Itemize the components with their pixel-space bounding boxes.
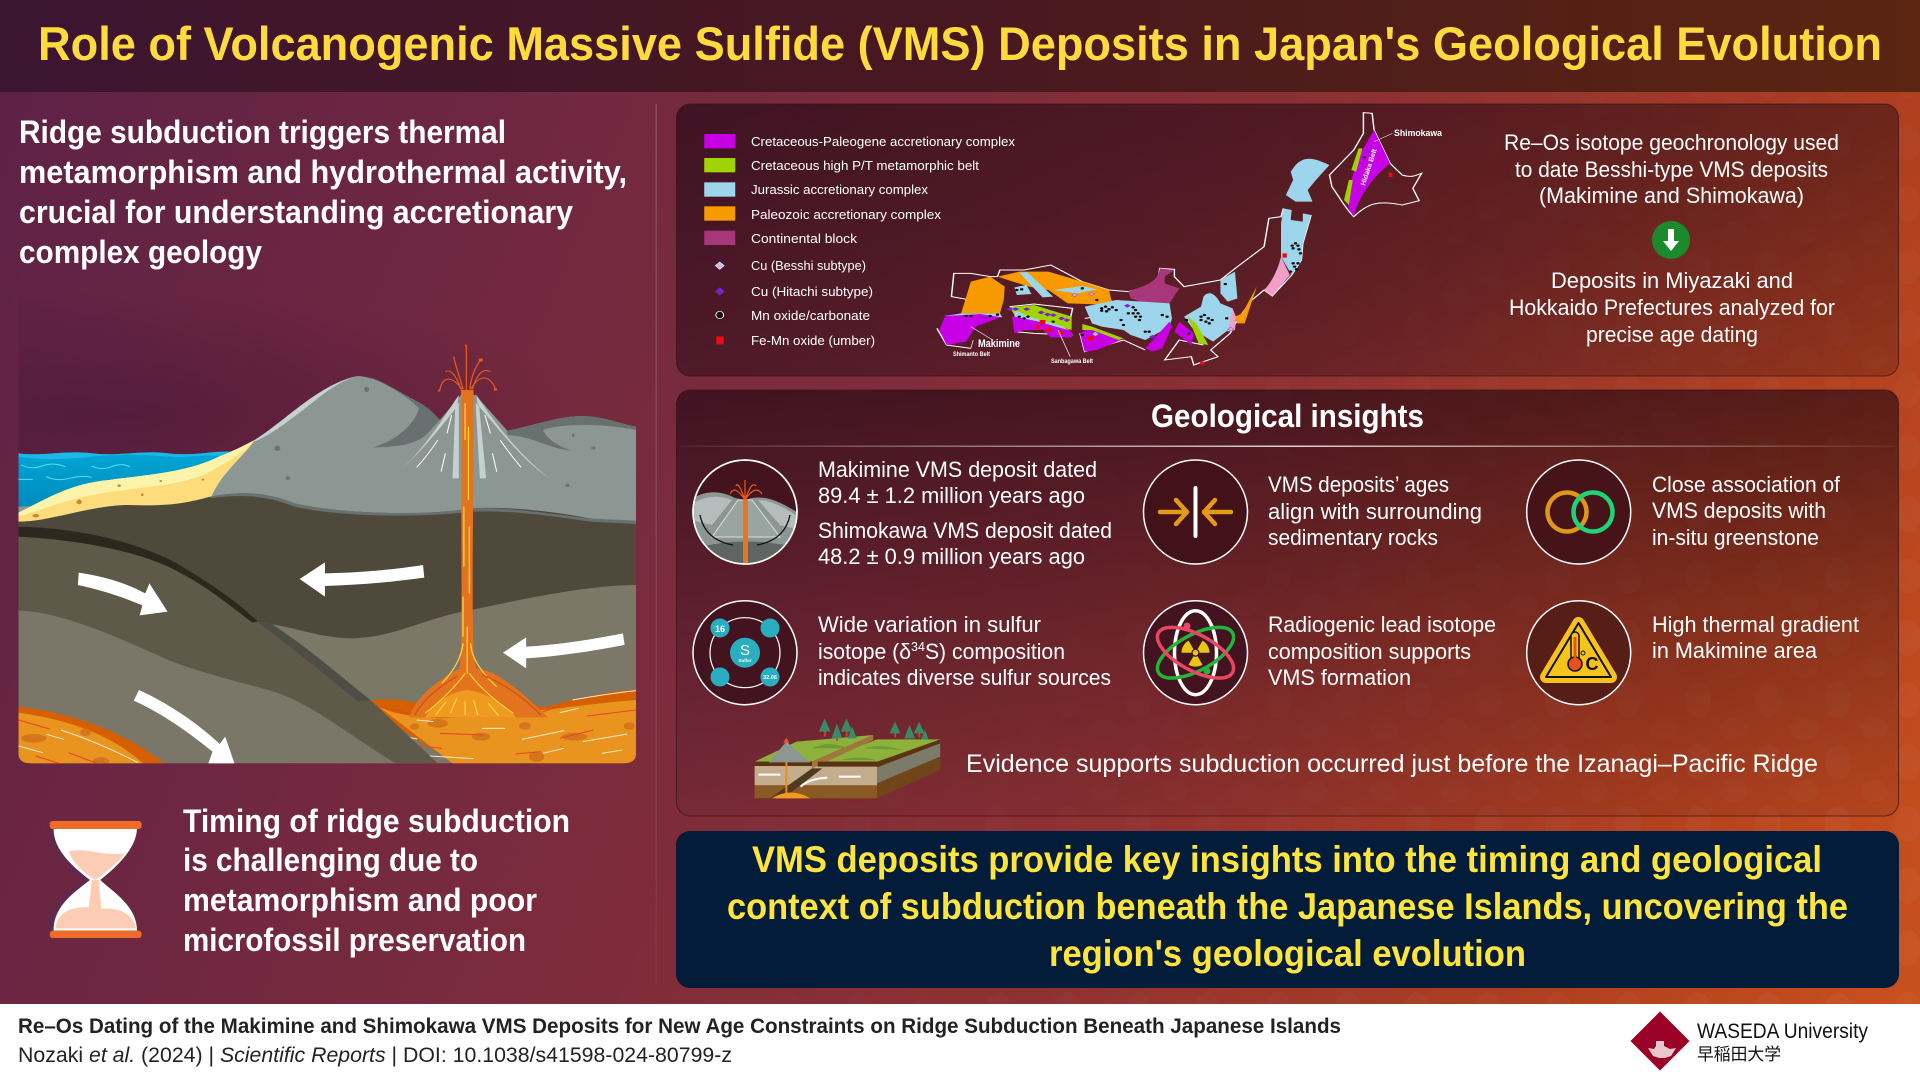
icon: linked rings xyxy=(1527,460,1631,564)
map labels: Shimokawa xyxy=(1394,128,1443,139)
panel: geological insights xyxy=(676,390,1898,816)
text: age alignment: VMS deposits’ ages xyxy=(1268,472,1449,497)
header band with title xyxy=(0,0,1920,92)
left intro text: metamorphism and hydrothermal activity, xyxy=(19,154,627,190)
text: prefectures analyzed: Hokkaido Prefectures analyzed for xyxy=(1509,295,1835,320)
text: timing challenge: metamorphism and poor xyxy=(183,882,537,918)
text: timing challenge xyxy=(183,803,570,958)
heading: Geological insights xyxy=(1151,398,1424,434)
logo: Waseda University xyxy=(1630,1012,1868,1070)
lower mantle wedge xyxy=(265,585,636,763)
text: timing challenge: Timing of ridge subduction xyxy=(183,803,570,839)
text: sulfur isotope: 34 xyxy=(911,639,925,654)
text: sulfur isotope xyxy=(818,612,1111,690)
icon: sulfur atom: Sulfur xyxy=(738,658,752,663)
eruption fountain xyxy=(440,345,496,390)
icon: sulfur atom: 32.06 xyxy=(763,675,777,681)
text: prefectures analyzed: precise age dating xyxy=(1586,322,1758,347)
text: prefectures analyzed: Deposits in Miyazaki and xyxy=(1551,268,1793,293)
text: age alignment: sedimentary rocks xyxy=(1268,525,1438,550)
map legend: Cretaceous high P/T metamorphic belt xyxy=(751,158,979,173)
magma right xyxy=(358,689,636,763)
citation reference: Nozaki et al. (2024) | Scientific Reports | DOI: 10.1038/s41598-024-80799-z xyxy=(18,1044,732,1067)
text: evidence statement: Evidence supports subduction occurred just before the Izanagi–Pacific Ridge xyxy=(966,750,1818,778)
map labels: Hidaka Belt xyxy=(1360,148,1379,187)
icon: ridge subduction block diagram xyxy=(755,718,940,798)
map of Japan xyxy=(937,113,1443,365)
panel: key conclusion: context of subduction beneath the Japanese Islands, uncovering the xyxy=(727,886,1848,927)
text: deposit dates xyxy=(818,457,1112,569)
subduction cross-section illustration xyxy=(18,344,636,764)
icon: thermal warning xyxy=(1527,601,1631,705)
map legend: Cu (Hitachi subtype) xyxy=(751,284,873,299)
arrow: upper plate xyxy=(300,562,424,597)
left intro text: complex geology xyxy=(19,234,262,270)
text: deposit dates: Makimine VMS deposit dated xyxy=(818,457,1097,482)
subducting plate xyxy=(19,537,438,763)
panel: map and dating xyxy=(676,104,1898,376)
text: timing challenge: is challenging due to xyxy=(183,842,478,878)
title: Role of Volcanogenic Massive Sulfide (VMS) Deposits in Japan's Geological Evolution xyxy=(38,17,1882,70)
oceanic lithosphere xyxy=(19,611,396,763)
text: age alignment xyxy=(1268,472,1482,550)
left intro text xyxy=(19,114,627,270)
arrow: subducting slab xyxy=(78,573,168,615)
logo: Waseda University: 早稲田大学 xyxy=(1697,1045,1781,1064)
text: lead isotope: VMS formation xyxy=(1268,665,1411,690)
icon: sulfur atom: 16 xyxy=(715,624,725,634)
text: Re-Os geochronology: to date Besshi-type VMS deposits xyxy=(1515,157,1828,182)
map legend: Cretaceous-Paleogene accretionary complex xyxy=(751,134,1016,149)
map legend: Mn oxide/carbonate xyxy=(751,308,870,323)
text: Re-Os geochronology: Re–Os isotope geochronology used xyxy=(1504,130,1839,155)
text: timing challenge: microfossil preservation xyxy=(183,922,526,958)
logo: Waseda University: WASEDA University xyxy=(1697,1020,1868,1043)
text: thermal gradient xyxy=(1652,612,1859,663)
citation title: Re–Os Dating of the Makimine and Shimokawa VMS Deposits for New Age Constraints on Ridge Subduction Beneath Japanese Islands xyxy=(18,1015,1341,1038)
footer xyxy=(0,1004,1920,1080)
text: greenstone xyxy=(1652,472,1841,550)
left intro text: crucial for understanding accretionary xyxy=(19,194,573,230)
text: prefectures analyzed xyxy=(1509,268,1835,347)
ocean xyxy=(18,452,230,512)
map legend xyxy=(704,134,1016,348)
text: deposit dates: 89.4 ± 1.2 million years ago xyxy=(818,483,1085,508)
volcano cone and lava conduit xyxy=(394,345,549,717)
icon: converging arrows xyxy=(1144,460,1248,564)
text: sulfur isotope: S) composition xyxy=(925,639,1065,664)
text: thermal gradient: in Makimine area xyxy=(1652,638,1818,663)
text: lead isotope: Radiogenic lead isotope xyxy=(1268,612,1496,637)
text: lead isotope: composition supports xyxy=(1268,639,1471,664)
text: deposit dates: 48.2 ± 0.9 million years ago xyxy=(818,544,1085,569)
upper plate xyxy=(19,493,636,640)
text: greenstone: Close association of xyxy=(1652,472,1841,497)
icon: hourglass xyxy=(47,821,142,938)
text: sulfur isotope: Wide variation in sulfur xyxy=(818,612,1041,637)
text: Re-Os geochronology: (Makimine and Shimokawa) xyxy=(1539,183,1804,208)
map legend: Cu (Besshi subtype) xyxy=(751,258,866,273)
text: lead isotope xyxy=(1268,612,1496,690)
map legend: Fe-Mn oxide (umber) xyxy=(751,333,875,348)
map labels: Sanbagawa Belt xyxy=(1051,359,1093,365)
icon: sulfur atom: S xyxy=(740,642,750,659)
map legend: Continental block xyxy=(751,231,858,246)
text: Re-Os geochronology xyxy=(1504,130,1839,208)
sand beach xyxy=(19,440,255,522)
left intro text: Ridge subduction triggers thermal xyxy=(19,114,506,150)
magma left xyxy=(19,707,164,763)
text: deposit dates: Shimokawa VMS deposit dated xyxy=(818,518,1112,543)
icon: green down arrow xyxy=(1652,221,1690,259)
arrow: lower slab xyxy=(134,690,234,763)
panel: key conclusion: VMS deposits provide key insights into the timing and geological xyxy=(752,839,1822,880)
text: age alignment: align with surrounding xyxy=(1268,499,1482,524)
text: sulfur isotope: indicates diverse sulfur sources xyxy=(818,665,1111,690)
text: greenstone: VMS deposits with xyxy=(1652,498,1826,523)
panel: key conclusion xyxy=(676,831,1899,988)
icon: thermal warning: C xyxy=(1586,654,1598,674)
icon: radioactive atom xyxy=(1144,601,1248,705)
mountains xyxy=(19,376,636,527)
icon: volcano circle xyxy=(692,459,798,565)
map legend: Paleozoic accretionary complex xyxy=(751,207,942,222)
map labels: Makimine xyxy=(978,338,1020,350)
map legend: Jurassic accretionary complex xyxy=(751,182,928,197)
text: thermal gradient: High thermal gradient xyxy=(1652,612,1859,637)
icon: sulfur atom xyxy=(693,601,797,705)
text: greenstone: in-situ greenstone xyxy=(1652,525,1819,550)
arrow: mantle wedge xyxy=(503,633,625,668)
text: sulfur isotope: isotope (δ xyxy=(818,639,915,664)
map labels: Shimanto Belt xyxy=(953,352,990,358)
panel: key conclusion: region's geological evolution xyxy=(1049,933,1526,974)
map labels xyxy=(953,128,1443,365)
